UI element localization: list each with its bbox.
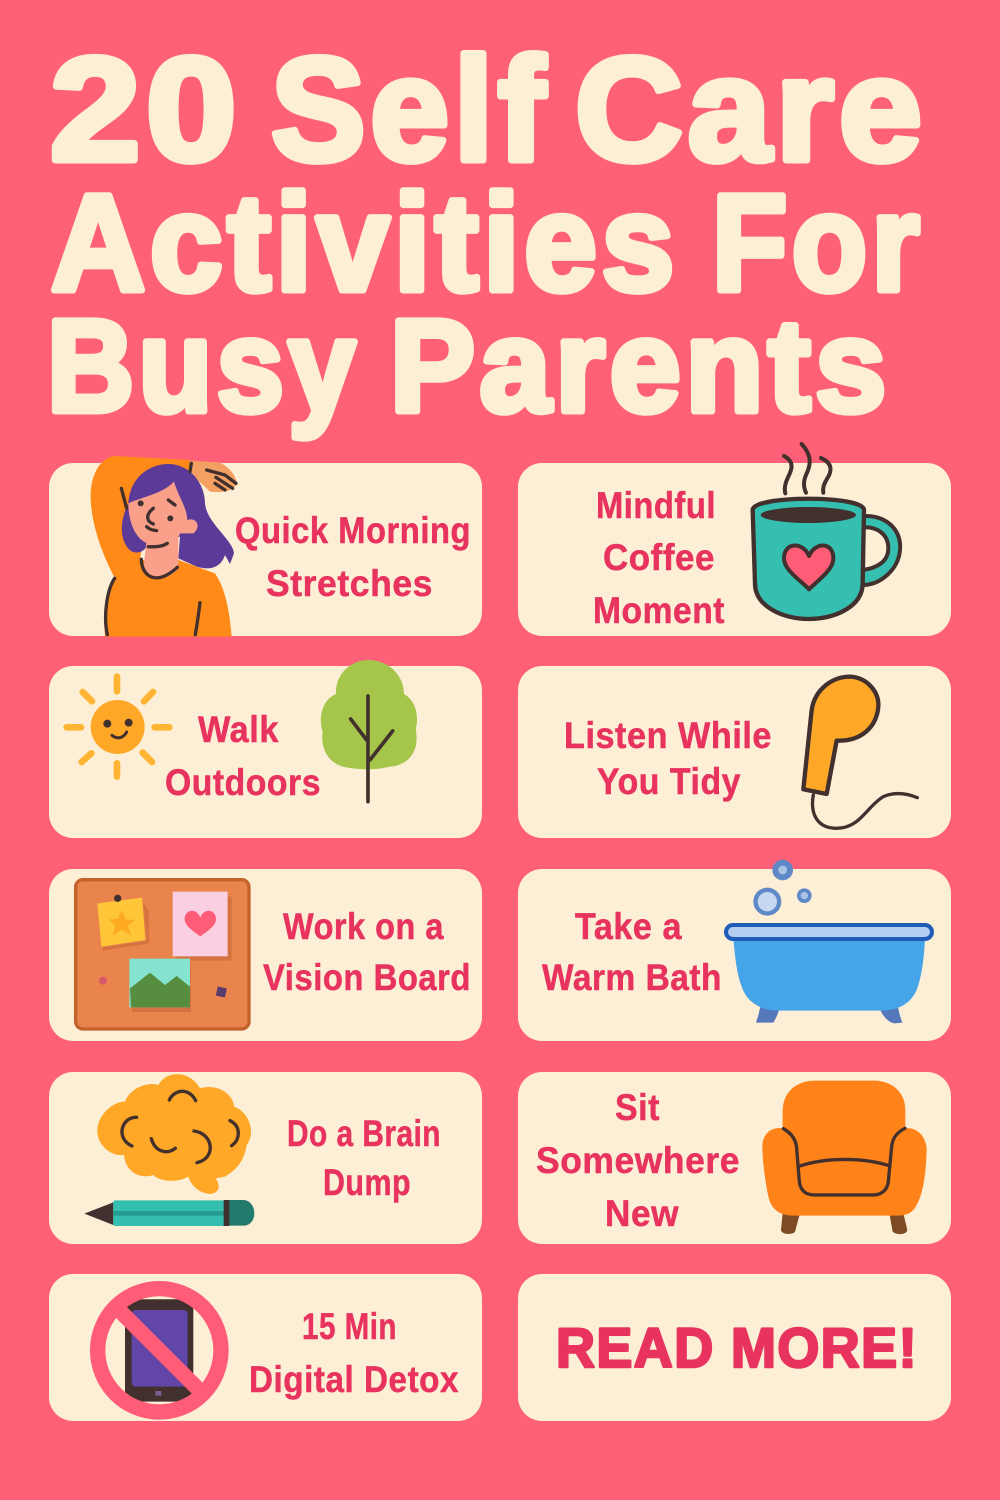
title: For — [712, 167, 924, 320]
panel: quick morning stretches — [49, 456, 482, 637]
label: Vision Board — [263, 957, 471, 998]
label — [542, 906, 722, 998]
panel: 15 min digital detox — [49, 1274, 482, 1421]
icon: smiling sun — [67, 677, 169, 777]
title: Self — [271, 28, 550, 192]
label — [536, 1087, 740, 1234]
label — [564, 715, 772, 802]
label: Quick Morning — [235, 510, 471, 551]
icon: earbud — [803, 677, 917, 828]
panel: mindful coffee moment — [518, 444, 951, 636]
title: Care — [575, 28, 927, 192]
label: Sit — [615, 1087, 660, 1128]
label: Outdoors — [165, 762, 321, 803]
label: Listen While — [564, 715, 772, 756]
icon: woman stretching — [91, 456, 237, 637]
label — [235, 510, 471, 604]
panel: do a brain dump — [49, 1072, 482, 1244]
label: Dump — [323, 1162, 411, 1203]
panel: read more call to action — [518, 1274, 951, 1421]
icon: bathtub with bubbles — [726, 860, 932, 1023]
label: 15 Min — [302, 1306, 397, 1347]
label: Coffee — [603, 537, 715, 578]
label: Stretches — [266, 563, 433, 604]
label — [593, 485, 725, 631]
label: Work on a — [283, 906, 444, 947]
icon: tree — [321, 660, 417, 802]
title — [47, 28, 927, 439]
label: Do a Brain — [287, 1113, 441, 1154]
title: Parents — [390, 292, 891, 439]
label: New — [605, 1193, 679, 1234]
label: Warm Bath — [542, 957, 722, 998]
label — [287, 1113, 441, 1203]
label: You Tidy — [597, 761, 741, 802]
panel: walk outdoors — [49, 660, 482, 838]
panel: work on a vision board — [49, 869, 482, 1041]
label: Digital Detox — [249, 1359, 459, 1400]
label: Moment — [593, 590, 725, 631]
panel: sit somewhere new — [518, 1072, 951, 1244]
label — [249, 1306, 459, 1400]
panel: take a warm bath — [518, 860, 951, 1041]
label: Somewhere — [536, 1140, 740, 1181]
icon: brain and pencil — [84, 1074, 254, 1226]
label: read more: READ MORE! — [556, 1316, 918, 1379]
label: Take a — [575, 906, 682, 947]
icon: no phone — [98, 1289, 221, 1412]
title: Activities — [51, 167, 679, 320]
label — [263, 906, 471, 998]
title: Busy — [47, 292, 360, 439]
label: Walk — [198, 709, 279, 750]
title: 20 — [50, 28, 242, 192]
icon: armchair — [762, 1081, 927, 1234]
label: Mindful — [596, 485, 716, 526]
icon: vision board — [76, 880, 249, 1029]
panel: listen while you tidy — [518, 666, 951, 838]
icon: coffee mug with heart — [753, 444, 900, 619]
label — [165, 709, 321, 803]
